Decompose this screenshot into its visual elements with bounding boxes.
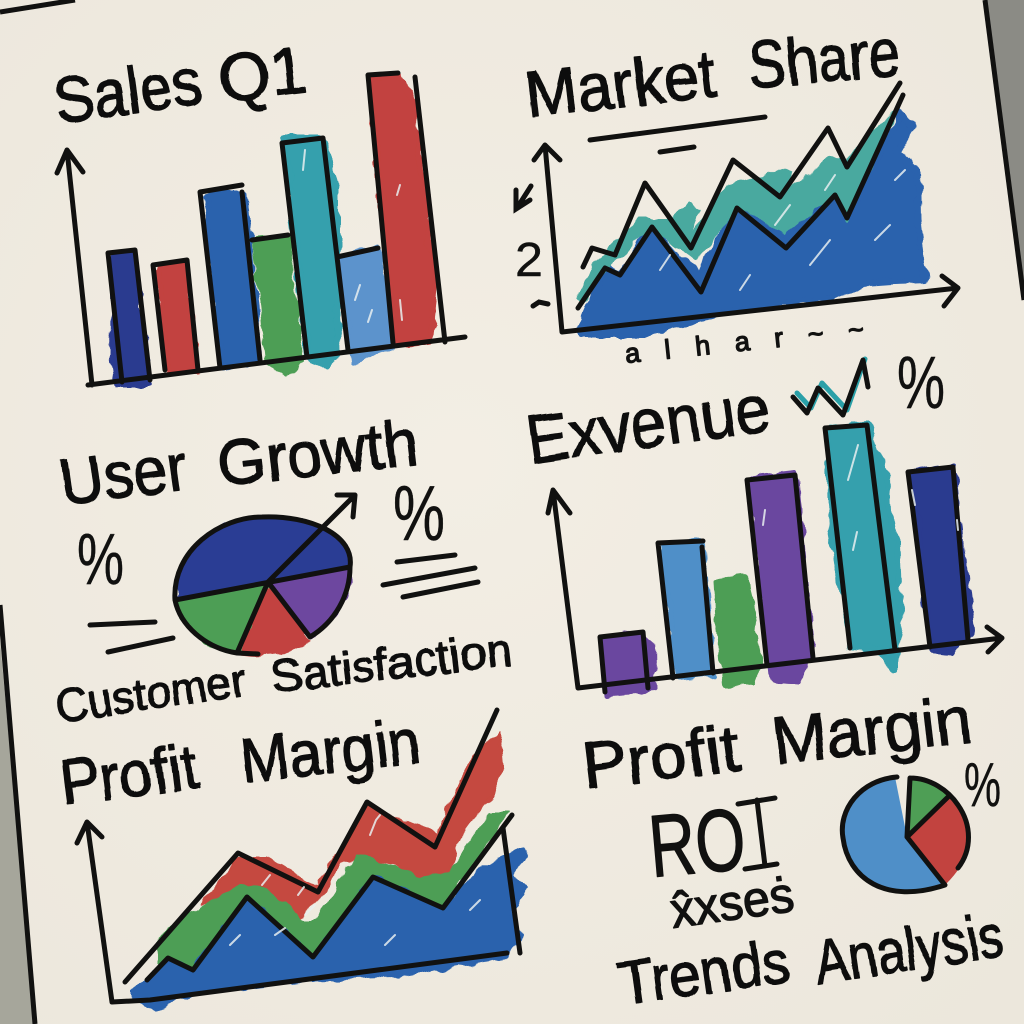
- heading: Profit Margin: Profit: [56, 731, 202, 819]
- pie chart: [842, 777, 968, 892]
- heading: Profit Margin: [56, 705, 423, 819]
- panel: Sales Q1: [50, 32, 465, 385]
- strokes right: [383, 555, 478, 597]
- heading: Sales Q1: Sales: [50, 44, 207, 138]
- text: Customer Satisfaction: [52, 623, 515, 732]
- text: Trends Analysis: [614, 902, 1008, 1019]
- percent: %: [964, 751, 1001, 820]
- heading: User Growth: Growth: [213, 405, 422, 501]
- desk corner: bottom left: [0, 605, 35, 1024]
- percent right: %: [393, 469, 445, 557]
- heading: Market Share: Market: [521, 36, 720, 132]
- heading: Profit Margin: [578, 682, 975, 803]
- pie chart: [175, 495, 355, 657]
- percent left: %: [77, 520, 124, 600]
- heading: Profit Margin: Profit: [578, 710, 744, 803]
- scribble: [793, 359, 868, 415]
- percent: %: [897, 341, 945, 424]
- axes: [534, 145, 958, 332]
- bar outlines and axes: [57, 73, 465, 385]
- heading: Market Share: Share: [745, 15, 903, 102]
- panel: Profit Margin area chart: [56, 705, 528, 1008]
- paint streaks: [303, 150, 402, 322]
- desk corner: top right: [985, 0, 1024, 300]
- label: xxses: x̂xseṡ: [667, 866, 797, 939]
- strokes left: [90, 622, 173, 652]
- text: Customer Satisfaction: Satisfaction: [268, 623, 515, 703]
- text: Trends Analysis: Trends: [614, 927, 794, 1019]
- heading: Sales Q1: [50, 32, 311, 138]
- heading underlines: [590, 117, 765, 152]
- heading: User Growth: [55, 405, 422, 520]
- bar fills: [112, 76, 436, 385]
- axes: [77, 822, 520, 1002]
- band: teal: [580, 113, 893, 303]
- paper edge: top left: [0, 0, 75, 12]
- area: blue: [133, 847, 528, 1008]
- heading: Market Share: [521, 15, 903, 132]
- lines: [583, 83, 900, 267]
- bar fills: [603, 424, 972, 694]
- panel: Market Share: [515, 15, 958, 369]
- axis number: 2: [515, 234, 543, 287]
- label: ROI: RO: [645, 789, 749, 896]
- bar outlines and axes: [548, 425, 1002, 692]
- band: green: [157, 813, 507, 967]
- heading: Profit Margin: Margin: [768, 682, 975, 778]
- axis labels: a l h a r ~ ~: [623, 314, 865, 369]
- paint streaks: [660, 170, 905, 290]
- heading: User Growth: User: [55, 429, 192, 520]
- panel: User Growth: [52, 405, 515, 732]
- lines: [125, 710, 497, 982]
- heading: Sales Q1: Q1: [215, 32, 311, 116]
- area: red: [203, 733, 503, 917]
- paint streaks: [763, 445, 958, 550]
- heading: Profit Margin: Margin: [236, 705, 423, 797]
- panel: Revenue: [522, 341, 1002, 694]
- area: blue: [578, 113, 925, 335]
- heading: Exvenue: Exvenue: [522, 369, 775, 479]
- arrow mark: [516, 186, 548, 306]
- paint streaks: [230, 815, 480, 945]
- text: Customer Satisfaction: Customer: [52, 654, 250, 732]
- panel: ROI: [578, 682, 1008, 1019]
